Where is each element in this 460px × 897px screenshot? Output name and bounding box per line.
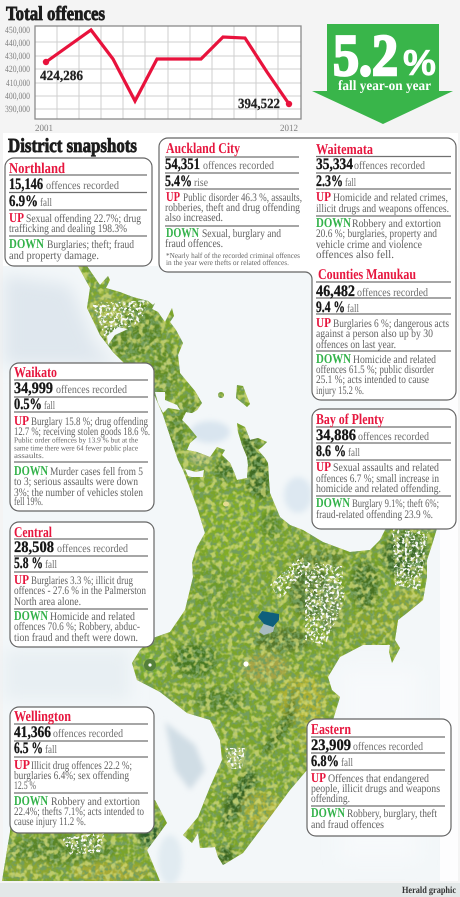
panel: Counties Manukau: Homicide and related: [353, 354, 436, 366]
panel: Wellington: Robbery and extortion: [51, 796, 140, 808]
map: North Island satellite view: [0, 260, 460, 885]
panel: Auckland City: robberies, theft and drug offending: [165, 202, 300, 214]
panel: Northland: UP: [9, 210, 24, 225]
land: North Island and top of South Island: [0, 260, 460, 885]
panel: Auckland City: rise: [194, 177, 208, 189]
panel: Counties Manukau: Counties Manukau: [318, 267, 416, 283]
panel: Auckland City: Auckland City: [166, 141, 240, 157]
panel: Wellington: fall: [45, 744, 57, 756]
panel: Wellington: 22.4%; thefts 7.1%; acts intended to: [14, 806, 144, 818]
panel: Bay of Plenty: UP: [316, 459, 331, 474]
panel: Eastern: DOWN: [311, 805, 345, 820]
footer band: [0, 883, 460, 897]
panel: Waitemata: DOWN: [316, 215, 351, 230]
Lake Taupo: [258, 611, 279, 635]
panel: Bay of Plenty: fraud-related offending 23.9 %.: [316, 509, 433, 521]
panel: Waitemata: vehicle crime and violence: [316, 239, 422, 251]
panel: Counties Manukau: against a person also up by 30: [316, 328, 433, 340]
panel: Waikato: same time there were 64 fewer public place: [14, 444, 139, 452]
panel: Central: Homicide and related: [50, 611, 135, 623]
panel: Wellington: 41,366: [14, 724, 51, 741]
panel: Central: fall: [45, 559, 57, 571]
panel: Northland: DOWN: [9, 236, 44, 251]
panel: Eastern: Robbery, burglary, theft: [347, 808, 438, 820]
panel: Auckland City: [165, 141, 302, 267]
panel: Waikato: UP: [14, 413, 29, 428]
heading: Total offences: Total offences: [6, 3, 105, 25]
cloud speckle over the land: [62, 300, 428, 855]
start value: 424,286: [40, 69, 83, 84]
panel: Counties Manukau: injury 15.2 %.: [316, 385, 364, 397]
panel: Northland: Northland: [9, 161, 66, 177]
panel: Counties Manukau: 25.1 %; acts intended to cause: [316, 374, 429, 386]
panel: Bay of Plenty: Sexual assaults and related: [333, 462, 439, 474]
panel: Waitemata: 35,334: [316, 156, 353, 173]
y axis labels: [5, 26, 30, 115]
panel: Waikato: fell 19%.: [14, 496, 43, 508]
panel: Waitemata: 2.3%: [316, 173, 343, 190]
panel: Eastern: Eastern: [311, 722, 352, 738]
panel: Auckland City: UP: [166, 189, 180, 204]
panel: Counties Manukau: fall: [347, 303, 359, 315]
panel: Wellington: burglaries 6.4%; sex offending: [14, 770, 129, 782]
panel: Waikato: to 3; serious assaults were down: [14, 476, 138, 488]
callout arrow: 5.2% fall year-on year: [312, 22, 453, 124]
panel: Eastern: 23,909: [311, 737, 351, 754]
panel: Central: offences 70.6 %; Robbery, abduc-: [14, 621, 140, 633]
panel: Waitemata: Waitemata: [316, 142, 373, 158]
panel: Central: tion fraud and theft were down.: [14, 632, 138, 644]
y axis labels: 440,000: [5, 39, 30, 49]
x axis labels: 2012: [280, 124, 298, 134]
panel: Central: offences - 27.6 % in the Palmerston: [14, 585, 146, 597]
panel: Waikato: 34,999: [14, 380, 53, 397]
panel: Northland: Burglaries; theft; fraud: [47, 239, 134, 251]
panel: Waitemata: [316, 142, 451, 261]
panel: Waikato: Burglary 15.8 %; drug offending: [31, 416, 148, 428]
panel: Eastern: and fraud offences: [311, 819, 384, 831]
harbours: [107, 327, 204, 477]
panel: Central: 28,508: [14, 539, 54, 556]
panel: Northland: Sexual offending 22.7%; drug: [26, 213, 141, 225]
arrow shape: [312, 24, 453, 124]
end value: 394,522: [238, 97, 280, 112]
panel: Waikato: DOWN: [14, 463, 48, 478]
heading: District snapshots: District snapshots: [8, 135, 137, 157]
panel: Auckland City: fraud offences.: [165, 238, 223, 250]
x axis labels: [35, 124, 298, 134]
panel: Central: offences recorded: [57, 543, 128, 555]
panel: Wellington: 12.5 %: [14, 780, 36, 792]
panel: Auckland City: in the year were thefts or related offences.: [166, 258, 289, 267]
panel: Northland: and property damage.: [9, 250, 99, 262]
panel: Central: 5.8 %: [14, 555, 43, 572]
panel: Bay of Plenty: Bay of Plenty: [316, 412, 384, 428]
panel: Northland: 15,146: [9, 176, 43, 193]
panel: Auckland City: also increased.: [165, 212, 223, 224]
panel: Wellington: 6.5 %: [14, 740, 43, 757]
panel: Eastern: fall: [341, 757, 353, 769]
panel: Waitemata: UP: [316, 189, 331, 204]
panel: Bay of Plenty: homicide and related offending.: [316, 483, 441, 495]
panel: Waikato: offences recorded: [56, 384, 127, 396]
arrow caption: fall year-on year: [338, 79, 431, 94]
line chart: total offences 2001-2012: [5, 26, 301, 134]
panel: Bay of Plenty: DOWN: [316, 495, 350, 510]
panel: Counties Manukau: offences recorded: [357, 287, 428, 299]
panel: Waikato: Public order offences by 13.9 % but at the: [14, 436, 139, 444]
panel: Waikato: 12.7 %; receiving stolen goods 18.6 %.: [14, 426, 150, 438]
vegetation patches: [5, 294, 427, 882]
panel: Auckland City: 54,351: [165, 156, 200, 173]
panel: Auckland City, Waitemata and Counties Manukau backing shape: [159, 138, 456, 400]
Pale towns: [223, 502, 229, 506]
panel: Waitemata: fall: [345, 177, 356, 189]
panel: Central: DOWN: [14, 608, 48, 623]
panel: Eastern: 6.8%: [311, 753, 339, 770]
panel: Eastern: [307, 719, 451, 836]
sea and cloud haze: [3, 266, 458, 885]
panel: Waitemata: Robbery and extortion: [352, 218, 441, 230]
panel: Bay of Plenty: 34,886: [316, 427, 356, 444]
panel: Counties Manukau: [316, 267, 451, 397]
panel: Eastern: people, illicit drugs and weapons: [311, 783, 440, 795]
panel: Wellington: UP: [14, 757, 30, 772]
chart grid: [35, 26, 301, 119]
panel: Counties Manukau: UP: [316, 315, 331, 330]
panel: Northland: offences recorded: [46, 180, 119, 192]
panel: Bay of Plenty: [312, 409, 456, 529]
panel: Waikato: fall: [44, 400, 55, 412]
y axis labels: 450,000: [5, 26, 30, 36]
panel: Counties Manukau: offences on last year.: [316, 339, 396, 351]
panel: Waikato: Murder cases fell from 5: [50, 466, 143, 478]
panel: Counties Manukau: 46,482: [316, 283, 355, 300]
panel: Eastern: UP: [311, 770, 326, 785]
panel: Waikato: 3%; the number of vehicles stolen: [14, 487, 143, 499]
big percentage: 5.2: [333, 22, 398, 88]
panel: Wellington: DOWN: [14, 793, 48, 808]
panel: Eastern: Offences that endangered: [328, 773, 429, 785]
panel: Wellington: [10, 707, 154, 833]
panel: Waitemata: offences recorded: [354, 160, 425, 172]
panel: Waitemata: offences also fell.: [316, 249, 394, 261]
panel: Northland: fall: [40, 197, 52, 209]
panel: Northland: trafficking and dealing 198.3%: [9, 223, 127, 235]
panel: Auckland City: *Nearly half of the recorded criminal offences: [166, 251, 300, 260]
panel: Waikato: assaults.: [14, 451, 44, 460]
panel: Central: Burglaries 3.3 %; illicit drug: [31, 575, 133, 587]
Mount Taranaki: [144, 659, 156, 671]
Mount Ruapehu: [243, 661, 249, 667]
panel: Northland: 6.9%: [9, 193, 38, 210]
panel: Auckland City: Sexual, burglary and: [202, 228, 281, 240]
panel: Wellington: Illicit drug offences 22.2 %;: [31, 760, 132, 772]
data line: [43, 30, 292, 107]
y axis labels: 430,000: [5, 52, 30, 62]
panel: Wellington: offences recorded: [53, 728, 123, 740]
panel: Bay of Plenty: offences recorded: [358, 431, 429, 443]
panel: Northland: [5, 158, 152, 266]
panel: Counties Manukau: DOWN: [316, 351, 351, 366]
panel: Waikato: [10, 363, 154, 511]
panel: Eastern: offending.: [311, 793, 350, 805]
panel: Auckland City: Public disorder 46.3 %, assaults,: [183, 192, 302, 204]
panel: Auckland City: offences recorded: [203, 160, 274, 172]
y axis labels: 390,000: [5, 105, 30, 115]
panel: Counties Manukau: 9.4 %: [316, 299, 345, 316]
x axis labels: 2001: [35, 124, 53, 134]
panel: Central: North area alone.: [14, 596, 81, 608]
panel: Auckland City: 5.4%: [165, 173, 192, 190]
panel: Wellington: Wellington: [14, 709, 72, 725]
panel: Central: UP: [14, 572, 29, 587]
panel: Waikato: 0.5%: [14, 396, 42, 413]
panel: Bay of Plenty: fall: [348, 447, 360, 459]
panel: Central: [10, 522, 154, 647]
panel: Central: Central: [14, 525, 52, 541]
y axis labels: 400,000: [5, 92, 30, 102]
y axis labels: 420,000: [5, 65, 30, 75]
panel: Auckland City: DOWN: [166, 225, 199, 240]
panel: Eastern: offences recorded: [353, 741, 423, 753]
percent sign: %: [403, 42, 436, 83]
y axis labels: 410,000: [6, 79, 30, 89]
land texture: [0, 260, 460, 885]
panel: Wellington: cause injury 11.2 %.: [14, 816, 86, 828]
panel: Bay of Plenty: 8.6 %: [316, 443, 346, 460]
panel: Waikato: Waikato: [14, 365, 57, 381]
